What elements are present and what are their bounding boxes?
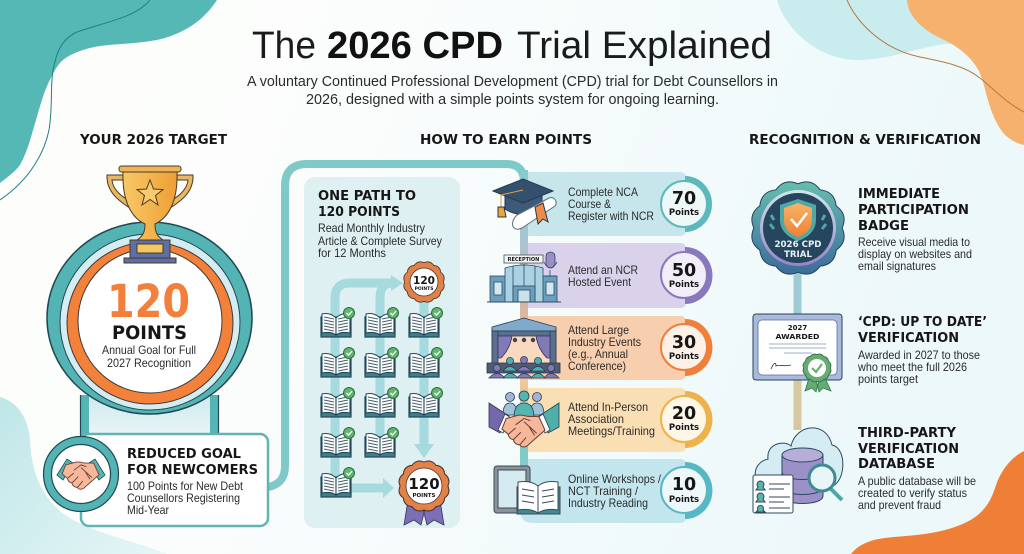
heading [127, 446, 258, 478]
badge: 20 points: 20 [672, 404, 696, 424]
label: Attend an NCR [568, 263, 638, 277]
heading: FOR NEWCOMERS [127, 462, 258, 478]
description: Article & Complete Survey [318, 234, 442, 248]
goal caption: Annual Goal for Full [102, 343, 196, 357]
label: Online Workshops / [568, 472, 662, 486]
description: Read Monthly Industry [318, 221, 425, 235]
background blob: top-right orange [907, 0, 1024, 145]
text: immediate participation badge: display on websites and [858, 247, 972, 261]
vertical connector [520, 170, 528, 509]
row: 20 points [489, 388, 712, 452]
text: immediate participation badge [858, 186, 972, 273]
medal: large 120 points with ribbon [399, 461, 449, 525]
title: 2026 CPD [327, 25, 503, 67]
icon: conference stage with audience [487, 318, 560, 378]
band [528, 316, 686, 380]
icon: trophy [107, 166, 193, 263]
panel: ways to earn points [487, 170, 712, 523]
label [568, 400, 655, 438]
icon: participation badge: TRIAL [784, 250, 813, 260]
panel: target [47, 166, 252, 436]
label [568, 472, 662, 510]
icon: awarded certificate [753, 314, 842, 392]
points label: POINTS [112, 322, 187, 344]
heading: recognition and verification: RECOGNITION & VERIFICATION [749, 132, 981, 148]
book grid [321, 308, 442, 497]
label [568, 185, 654, 223]
background blob: bottom-right orange [851, 451, 1024, 554]
heading: 120 POINTS [318, 204, 400, 220]
heading [318, 188, 416, 220]
row: 10 points [494, 459, 712, 523]
text: cpd up to date verification: points target [858, 372, 919, 386]
label: NCT Training / [568, 484, 639, 498]
text: third-party verification database: THIRD-PARTY [858, 425, 956, 441]
badge: 30 points: 30 [672, 333, 696, 353]
background line: top-left curve [0, 0, 150, 200]
text: cpd up to date verification: Awarded in 2027 to those [858, 348, 980, 362]
medal: small 120 points: 120 [413, 275, 435, 287]
neck [81, 395, 218, 436]
badge: 70 points [661, 176, 712, 232]
badge: 50 points: 50 [672, 261, 696, 281]
text: immediate participation badge: email signatures [858, 259, 936, 273]
text: immediate participation badge: Receive visual media to [858, 235, 970, 249]
label [568, 323, 641, 373]
subtitle: 2026, designed with a simple points system for ongoing learning. [306, 91, 719, 108]
row: 30 points [487, 316, 712, 380]
icon: handshake [44, 436, 118, 512]
outer ring [47, 222, 252, 414]
background blob: top-left teal [0, 0, 217, 183]
subtitle [247, 73, 778, 108]
big number: 120 [107, 275, 190, 328]
label: Association [568, 412, 624, 426]
medal: large 120 points with ribbon: POINTS [412, 493, 436, 499]
description: Counsellors Registering [127, 491, 240, 505]
description [318, 221, 442, 260]
pale ring [60, 234, 240, 410]
label: Meetings/Training [568, 424, 655, 438]
badge: 50 points [661, 247, 712, 304]
title: Trial Explained [517, 25, 772, 67]
text: third-party verification database: VERIFICATION [858, 441, 959, 457]
label: Hosted Event [568, 275, 632, 289]
box [81, 434, 268, 526]
text: cpd up to date verification: VERIFICATION [858, 330, 959, 346]
band [520, 459, 686, 523]
medal: small 120 points [404, 262, 444, 302]
heading: REDUCED GOAL [127, 446, 241, 462]
badge: 10 points: 10 [672, 475, 696, 495]
text: third-party verification database: DATABASE [858, 456, 935, 472]
icon: conference building: RECEPTION [508, 257, 539, 263]
path arrows [335, 275, 434, 498]
label: Register with NCR [568, 209, 654, 223]
icon: participation badge: 2026 CPD [774, 240, 822, 250]
text: immediate participation badge: BADGE [858, 218, 909, 234]
icon: awarded certificate: AWARDED [776, 333, 820, 341]
goal caption [102, 343, 196, 370]
row: 70 points [493, 172, 712, 236]
orange ring [67, 242, 233, 404]
badge: 30 points: Points [669, 352, 699, 362]
text: third-party verification database: created to verify status [858, 486, 967, 500]
band [528, 243, 686, 308]
badge: 70 points: Points [669, 208, 699, 218]
title: The [252, 25, 316, 67]
label: Conference) [568, 359, 626, 373]
badge: 50 points: Points [669, 280, 699, 290]
text: third-party verification database: and prevent fraud [858, 498, 941, 512]
text: immediate participation badge: PARTICIPATION [858, 202, 969, 218]
label: Course & [568, 197, 611, 211]
medal: small 120 points: POINTS [415, 286, 433, 292]
medal: large 120 points with ribbon: 120 [408, 475, 440, 493]
badge: 70 points: 70 [672, 189, 696, 209]
text: third-party verification database [858, 425, 976, 512]
goal caption: 2027 Recognition [107, 356, 191, 370]
label: Attend In-Person [568, 400, 648, 414]
background line: top-right curve [847, 0, 1024, 112]
inner circle [78, 249, 222, 393]
badge: 30 points [661, 319, 712, 376]
connector: teal path from newcomers box to earn points [268, 164, 524, 487]
panel: one path to 120 points [304, 177, 460, 528]
background blob: top-right pale teal [777, 0, 1024, 60]
band [528, 172, 686, 236]
badge: 20 points [661, 391, 712, 448]
heading: how to earn points: HOW TO EARN POINTS [420, 132, 592, 148]
text: immediate participation badge: IMMEDIATE [858, 186, 940, 202]
label: Industry Events [568, 335, 641, 349]
icon: tablet and book [494, 466, 560, 514]
icon: graduation cap and diploma [493, 179, 556, 229]
label: Attend Large [568, 323, 629, 337]
badge: 10 points [661, 462, 712, 519]
panel: reduced goal for newcomers [44, 434, 268, 526]
label [568, 263, 638, 289]
connector: recognition timeline [794, 272, 802, 430]
text: cpd up to date verification [857, 314, 987, 386]
panel background [304, 177, 460, 528]
icon: conference building [487, 252, 561, 302]
background blob: bottom-left pale teal [0, 397, 168, 554]
heading: ONE PATH TO [318, 188, 416, 204]
description [127, 479, 244, 517]
icon: cloud database [753, 428, 843, 513]
text: cpd up to date verification: ‘CPD: UP TO DATE’ [858, 314, 987, 330]
badge: 10 points: Points [669, 495, 699, 505]
icon: participation badge [752, 182, 844, 274]
description: Mid-Year [127, 503, 169, 517]
text: third-party verification database: A public database will be [858, 474, 976, 488]
description: 100 Points for New Debt [127, 479, 244, 493]
heading: your 2026 target: YOUR 2026 TARGET [79, 132, 228, 148]
label: (e.g., Annual [568, 347, 628, 361]
text: cpd up to date verification: who meet the full 2026 [857, 360, 967, 374]
icon: awarded certificate: 2027 [788, 324, 807, 332]
description: for 12 Months [318, 246, 386, 260]
badge: 20 points: Points [669, 423, 699, 433]
row: 50 points [487, 243, 712, 308]
title [252, 25, 772, 67]
label: Complete NCA [568, 185, 638, 199]
label: Industry Reading [568, 496, 648, 510]
band [528, 388, 686, 452]
icon: people and handshake [489, 391, 559, 447]
subtitle: A voluntary Continued Professional Development (CPD) trial for Debt Counsellors in [247, 73, 778, 90]
